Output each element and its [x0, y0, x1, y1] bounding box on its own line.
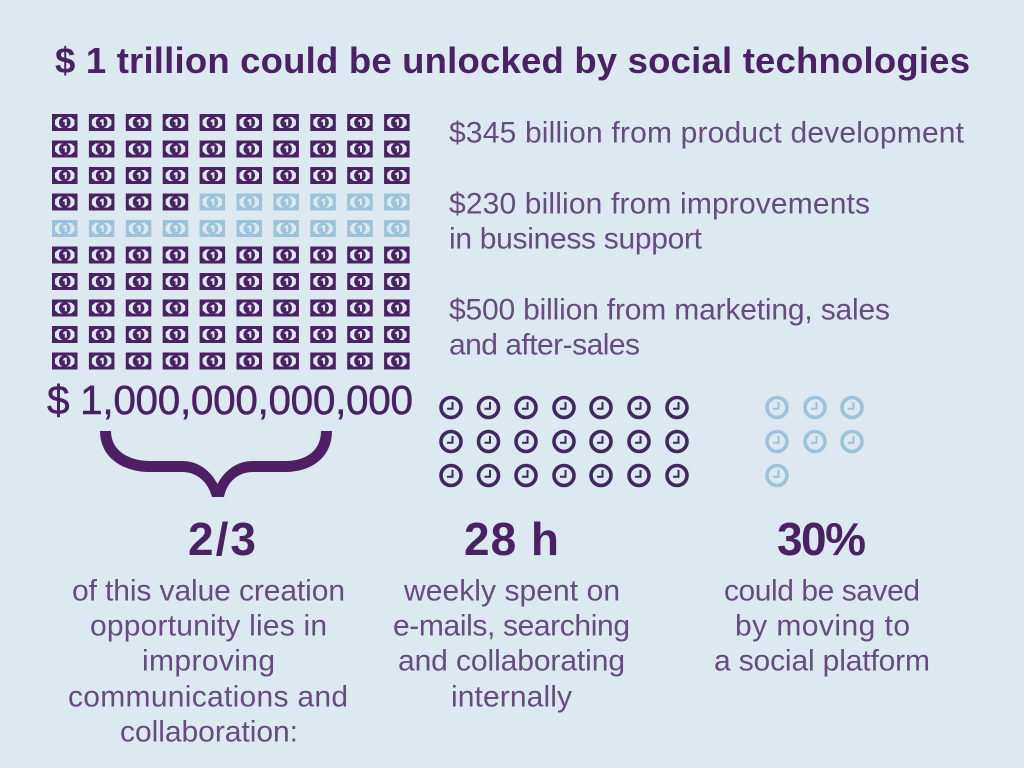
description: 30 percent: by moving to	[735, 610, 910, 642]
description: 30 percent: a social platform	[714, 644, 930, 678]
icon grid: 30 percent saved as light clocks	[767, 398, 862, 486]
description: two thirds: collaboration:	[120, 716, 298, 748]
statistic: 30 percent: 30%	[777, 513, 866, 565]
total amount label: $ 1,000,000,000,000	[47, 377, 413, 423]
description: 28 hours: e-mails, searching	[393, 610, 630, 642]
description: two thirds: improving	[142, 644, 275, 678]
statistic: 28 hours: 28 h	[464, 513, 559, 565]
text block: value breakdown by source: $230 billion from improvements	[449, 188, 870, 220]
description: 30 percent	[714, 574, 930, 678]
text block: value breakdown by source: $500 billion from marketing, sales	[449, 294, 890, 326]
description: 28 hours: weekly spent on	[403, 574, 620, 608]
description: 28 hours: internally	[451, 680, 572, 714]
description: two thirds: opportunity lies in	[90, 610, 327, 642]
statistic: two thirds: 2/3	[188, 513, 256, 565]
description: 28 hours	[393, 574, 630, 714]
title: $ 1 trillion could be unlocked by social technologies	[55, 40, 970, 81]
statistic: 30 percent	[714, 513, 930, 678]
icon: curly brace	[100, 431, 332, 497]
text block: value breakdown by source: in business support	[449, 222, 703, 256]
description: 30 percent: could be saved	[724, 574, 920, 608]
statistic: two thirds	[68, 513, 348, 748]
description: two thirds: communications and	[68, 680, 348, 714]
description: two thirds	[68, 574, 348, 748]
icon grid: 28 hours as dark clocks	[441, 398, 687, 486]
text block: value breakdown by source: and after-sales	[449, 328, 640, 362]
text block: value breakdown by source	[449, 116, 965, 362]
description: two thirds: of this value creation	[72, 574, 345, 608]
statistic: 28 hours	[393, 513, 630, 714]
text block: value breakdown by source: $345 billion from product development	[449, 116, 965, 150]
icon grid: 100 banknotes representing one trillion dollars	[52, 114, 410, 370]
description: 28 hours: and collaborating	[398, 644, 625, 678]
